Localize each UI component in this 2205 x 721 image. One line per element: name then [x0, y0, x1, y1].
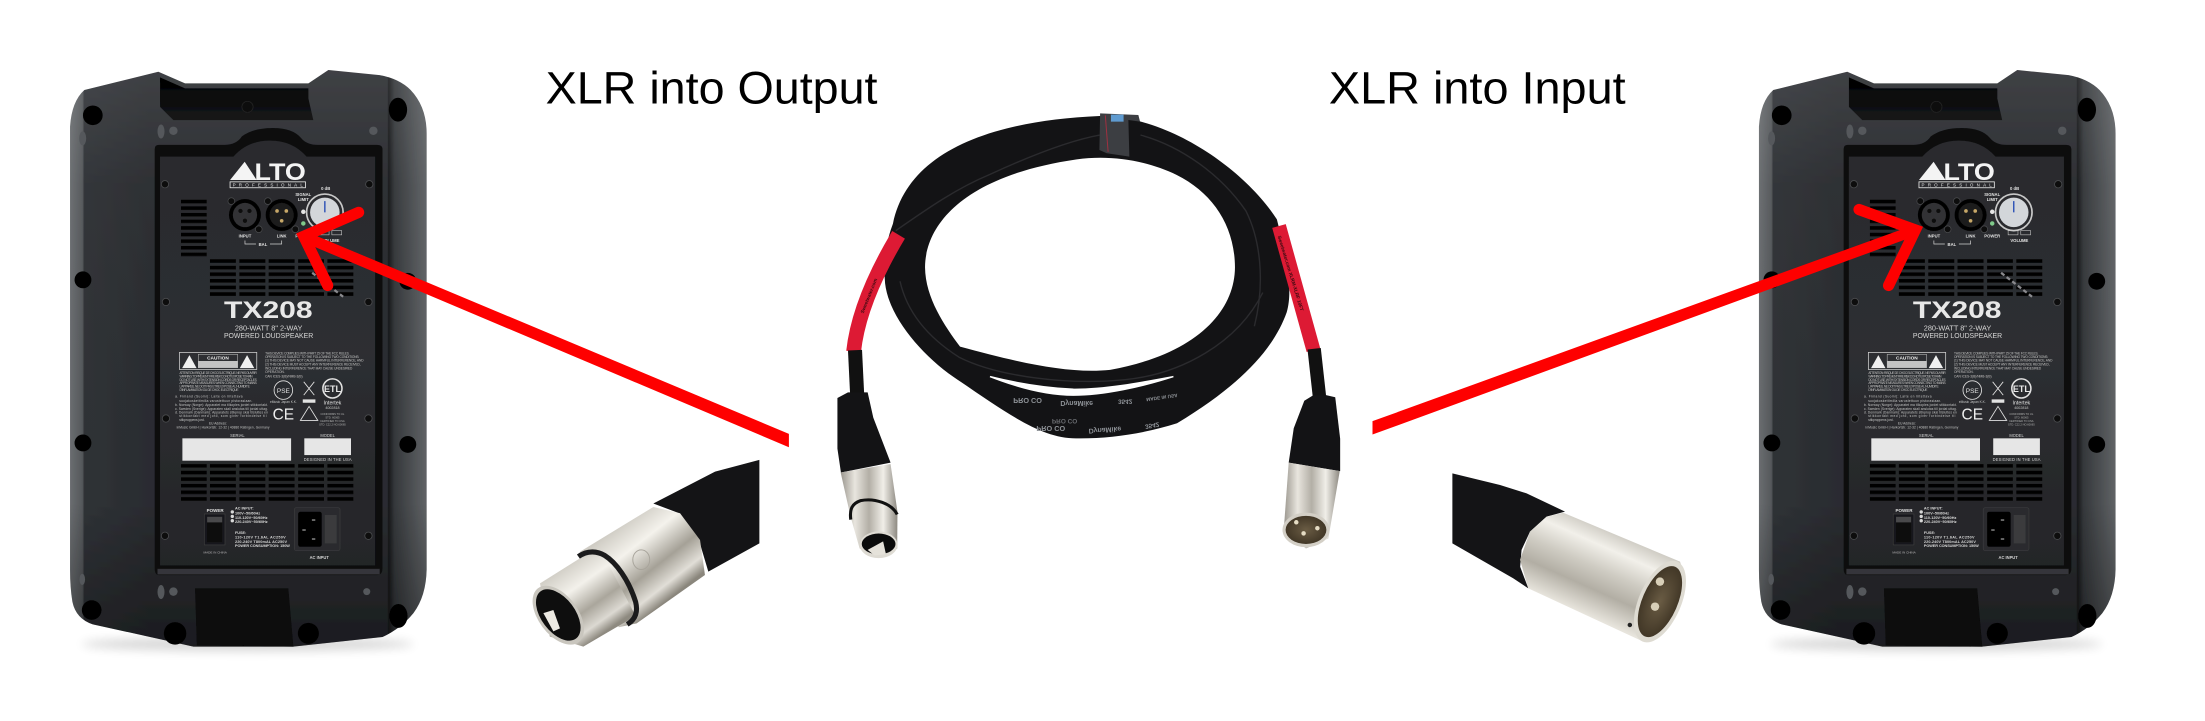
- compliance text: OPERATION IS SUBJECT TO THE FOLLOWING TWO CONDITIONS:: [1954, 355, 2048, 359]
- cable printing: 3542: [1118, 397, 1133, 404]
- AC ratings text: 110-120V T1.6AL AC250V: [235, 535, 286, 539]
- connector labels: POWER: [1984, 234, 2000, 239]
- cable printing: PRO CO: [1013, 396, 1042, 405]
- compliance text: D'INFLAMMATION OU DE CHOC ELECTRIQUE: [1868, 388, 1928, 392]
- heading: XLR into Input: XLR into Input: [1329, 62, 1626, 113]
- serial and model labels: DESIGNED IN THE USA: [1993, 457, 2041, 462]
- connector labels: LIMIT: [298, 197, 309, 202]
- sleeve printing: left: Sweetwater.com: [860, 278, 879, 314]
- serial and model labels: [1871, 433, 2041, 462]
- compliance text: (2) THIS DEVICE MUST ACCEPT ANY INTERFERENCE RECEIVED,: [1954, 362, 2050, 366]
- strand highlights: [896, 135, 1263, 381]
- compliance text: CAN ICES-3(B)/NMB-3(B): [1954, 375, 1992, 379]
- power switch: POWER: [1896, 508, 1913, 513]
- compliance text: L'APPAREIL NE DOIT PAS ETRE EXPOSE A L'HUMIDITE: [179, 385, 251, 389]
- control panel: [160, 141, 375, 565]
- connector labels: LIMIT: [1987, 197, 1998, 202]
- BAL bracket: [1934, 240, 1971, 244]
- sleeve printing: right: Sweetwater.com XLRM-XLRF 10FT: [1276, 235, 1304, 312]
- vents: [1870, 198, 2042, 502]
- white gap between strands: [990, 377, 1173, 395]
- panel screws: [1850, 181, 2062, 539]
- compliance text: L'APPAREIL NE DOIT PAS ETRE EXPOSE A L'HUMIDITE: [1868, 385, 1939, 389]
- model description: [1913, 325, 2002, 340]
- compliance text: THIS DEVICE COMPLIES WITH PART 15 OF THE FCC RULES.: [265, 351, 350, 355]
- arrow: to right speaker input: [1372, 210, 1918, 435]
- compliance text: [175, 351, 364, 430]
- AC inlet: AC INPUT: [1999, 555, 2018, 560]
- mounting holes: [1763, 98, 2105, 645]
- certification marks: Intertek: [2012, 400, 2031, 406]
- AC ratings text: AC INPUT:: [235, 506, 254, 510]
- AC ratings text: 110-120V~50/60Hz: [1924, 516, 1956, 520]
- AC ratings text: 100V~50/60Hz: [235, 511, 260, 515]
- AC inlet: [1983, 508, 2029, 560]
- certification marks: STD. 60065: [2014, 415, 2029, 419]
- compliance text: APPROPRIATE MEASURES WHEN CONNECTING TO MAINS: [1868, 381, 1946, 385]
- bottom recess: [195, 588, 293, 647]
- bottom recess: [1884, 588, 1982, 647]
- certification marks: eMusic Japan K.K.: [1959, 400, 1986, 404]
- power switch: MADE IN CHINA: [1892, 551, 1917, 555]
- XLR input socket: [1917, 198, 1951, 233]
- compliance text: d. Denmark (Danmark): Apparatets stikprop skal tilsluttes en: [1864, 411, 1957, 415]
- power switch: [1892, 508, 1917, 555]
- compliance text: D'INFLAMMATION OU DE CHOC ELECTRIQUE: [179, 388, 239, 392]
- frame lower strip: [158, 569, 380, 574]
- compliance text: APPROPRIATE MEASURES WHEN CONNECTING TO MAINS: [179, 381, 257, 385]
- compliance text: WARNING: TO PREVENT FIRE RISK DO NOT EXPOSE TO RAIN: [179, 374, 253, 378]
- AC inlet: [294, 508, 340, 560]
- XLR link socket: [265, 198, 299, 233]
- caution box: [179, 352, 257, 369]
- AC ratings text: [231, 506, 290, 548]
- certification marks: ETL: [2013, 384, 2030, 394]
- handle screw: [1931, 101, 1942, 113]
- body screws: [1768, 124, 2066, 599]
- AC ratings text: 220-240V~50/60Hz: [1924, 520, 1957, 524]
- certification marks: STD. 60065: [325, 415, 340, 419]
- certification marks: Intertek: [324, 400, 342, 406]
- compliance text: suojakoskettimilla varustettuun pistorasiaan.: [1868, 399, 1941, 403]
- model name: TX208: [224, 297, 313, 324]
- power switch: POWER: [207, 508, 224, 513]
- XLR input socket: [228, 198, 262, 233]
- compliance text: WARNING: TO PREVENT FIRE RISK DO NOT EXPOSE TO RAIN: [1868, 374, 1942, 378]
- cable printing: 3542: [1144, 420, 1160, 430]
- body shading: [1759, 70, 2116, 647]
- certification marks: CERTIFIED TO CSA: [2009, 419, 2034, 423]
- compliance text: (2) THIS DEVICE MUST ACCEPT ANY INTERFERENCE RECEIVED,: [265, 362, 361, 366]
- body shading: [70, 70, 427, 647]
- compliance text: c. Sweden (Sverige): Apparaten skall anslutas till jordat uttag.: [1864, 407, 1957, 411]
- certification marks: CONFORMS TO UL: [2009, 412, 2034, 416]
- heading: XLR into Output: XLR into Output: [546, 62, 878, 113]
- certification marks: STD. C22.2 NO.60065: [319, 422, 346, 426]
- certification marks: CONFORMS TO UL: [320, 412, 345, 416]
- body screws: [79, 124, 378, 599]
- certification marks: [1959, 379, 2035, 426]
- certification marks: ETL: [324, 384, 341, 394]
- power switch: MADE IN CHINA: [204, 551, 228, 555]
- male XLR connector: [1282, 395, 1340, 548]
- cable printing: [1013, 392, 1178, 434]
- speaker: left: [70, 70, 427, 651]
- compliance text: INCLUDING INTERFERENCE THAT MAY CAUSE UNDESIRED: [265, 367, 353, 371]
- compliance text: a. Finland (Suomi): Laite on liitettava: [175, 395, 243, 399]
- AC ratings text: POWER CONSUMPTION: 150W: [235, 544, 290, 548]
- cable stub: right: [1314, 349, 1320, 399]
- certification marks: 4002818: [325, 406, 340, 410]
- compliance text: DO NOT USE WITH EXTENSION CORDS OR RECEPTACLES: [1868, 378, 1946, 382]
- AC ratings text: FUSE:: [1924, 531, 1935, 535]
- connector labels: [1928, 186, 2029, 247]
- model description: 280-WATT 8" 2-WAY: [235, 325, 303, 332]
- panel frame: [155, 128, 382, 575]
- compliance text: (1) THIS DEVICE MAY NOT CAUSE HARMFUL INTERFERENCE, AND: [1954, 358, 2053, 362]
- XLR link socket: [1953, 198, 1988, 233]
- compliance text: ATTENTION: RISQUE DE CHOC ELECTRIQUE. NE PAS OUVRIR: [1868, 371, 1946, 375]
- compliance text: OPERATION.: [265, 370, 285, 374]
- compliance text: INCLUDING INTERFERENCE THAT MAY CAUSE UNDESIRED: [1954, 367, 2042, 371]
- connector labels: INPUT: [1928, 234, 1941, 239]
- logo: ALTO: PROFESSIONAL: [1922, 183, 1992, 188]
- AC ratings text: 110-120V T1.6AL AC250V: [1924, 535, 1975, 539]
- certification marks: eMusic Japan K.K.: [270, 400, 297, 404]
- volume knob: [301, 194, 343, 235]
- speaker: right: [1759, 70, 2116, 651]
- AC ratings text: 220-240V T800mAL AC250V: [1924, 540, 1976, 544]
- AC ratings text: POWER CONSUMPTION: 150W: [1924, 544, 1979, 548]
- model description: 280-WATT 8" 2-WAY: [1924, 325, 1992, 332]
- ground shadow: [82, 637, 413, 651]
- AC inlet: AC INPUT: [310, 555, 329, 560]
- caution box: CAUTION: [1896, 356, 1918, 362]
- compliance text: THIS DEVICE COMPLIES WITH PART 15 OF THE FCC RULES.: [1954, 351, 2038, 355]
- handle screw: [242, 101, 253, 113]
- speaker body: [70, 70, 427, 647]
- compliance text: (1) THIS DEVICE MAY NOT CAUSE HARMFUL INTERFERENCE, AND: [265, 358, 364, 362]
- AC ratings text: 100V~50/60Hz: [1924, 511, 1949, 515]
- serial and model labels: SERIAL: [230, 433, 245, 438]
- connector labels: VOLUME: [2010, 238, 2029, 243]
- connector labels: LINK: [1966, 234, 1975, 239]
- AC ratings text: 110-120V~50/60Hz: [235, 516, 268, 520]
- compliance text: OPERATION.: [1954, 370, 1974, 374]
- compliance text: OPERATION IS SUBJECT TO THE FOLLOWING TWO CONDITIONS:: [265, 355, 359, 359]
- connector labels: VOLUME: [321, 238, 340, 243]
- compliance text: inMusic GmbH | Harkortstr. 12-32 | 40880 Ratingen, Germany: [177, 426, 270, 430]
- compliance text: ATTENTION: RISQUE DE CHOC ELECTRIQUE. NE PAS OUVRIR: [179, 371, 257, 375]
- logo: ALTO: [230, 159, 306, 188]
- model description: POWERED LOUDSPEAKER: [1913, 333, 2002, 340]
- model name: TX208: [1913, 297, 2002, 324]
- ground shadow: [1770, 637, 2102, 651]
- cable coil: [884, 116, 1289, 438]
- red sleeve: right: [1279, 226, 1313, 350]
- XLR cable: [837, 113, 1340, 558]
- connector labels: 0 dB: [2010, 186, 2019, 191]
- panel screws: [161, 181, 373, 539]
- serial and model labels: DESIGNED IN THE USA: [304, 457, 352, 462]
- serial and model labels: MODEL: [2009, 433, 2025, 438]
- model description: [224, 325, 313, 340]
- connector labels: BAL: [1948, 242, 1957, 247]
- compliance text: stikkontakt med jord, som giver forbindelse til: [1868, 414, 1956, 418]
- cable printing: PRO CO: [1052, 417, 1077, 424]
- compliance text: stikkontakt med jord, som giver forbindelse til: [179, 414, 267, 418]
- compliance text: stikproppens jord.: [1868, 418, 1894, 422]
- compliance text: d. Denmark (Danmark): Apparatets stikprop skal tilsluttes en: [175, 411, 268, 415]
- AC ratings text: AC INPUT:: [1924, 506, 1943, 510]
- compliance text: b. Norway (Norge): Apparatet ma tilkoples jordet stikkontakt.: [175, 403, 268, 407]
- power switch: [204, 508, 228, 555]
- certification marks: CE: [273, 406, 294, 423]
- logo: ALTO: PROFESSIONAL: [233, 183, 303, 188]
- compliance text: inMusic GmbH | Harkortstr. 12-32 | 40880 Ratingen, Germany: [1866, 426, 1959, 430]
- wire seen through vent: [2001, 273, 2032, 297]
- cable printing: DynaMike: [1088, 425, 1122, 434]
- caution box: CAUTION: [207, 356, 229, 362]
- logo: ALTO: LTO: [1943, 159, 1995, 186]
- model description: POWERED LOUDSPEAKER: [224, 333, 313, 340]
- compliance text: CAN ICES-3(B)/NMB-3(B): [265, 375, 303, 379]
- frame lower strip: [1846, 569, 2069, 574]
- handle recess: [160, 77, 313, 120]
- vents: [181, 198, 353, 502]
- AC ratings text: FUSE:: [235, 531, 246, 535]
- certification marks: 4002818: [2014, 406, 2028, 410]
- close-up: female XLR: [522, 460, 759, 654]
- red sleeve: left: [854, 235, 899, 352]
- certification marks: CERTIFIED TO CSA: [320, 419, 345, 423]
- certification marks: PSE: [1966, 388, 1979, 395]
- serial and model labels: [182, 433, 352, 462]
- certification marks: PSE: [277, 388, 291, 395]
- close-up: male XLR: [1452, 473, 1697, 650]
- volume knob: [1990, 194, 2032, 235]
- connector labels: LINK: [277, 234, 287, 239]
- certification marks: STD. C22.2 NO.60065: [2008, 422, 2035, 426]
- arrow: to left speaker output: [300, 212, 789, 447]
- connector labels: SIGNAL: [1984, 192, 2001, 197]
- wire seen through vent: [312, 273, 343, 297]
- logo: ALTO: [1919, 159, 1995, 188]
- compliance text: suojakoskettimilla varustettuun pistorasiaan.: [179, 399, 253, 403]
- certification marks: CE: [1962, 406, 1983, 423]
- compliance text: b. Norway (Norge): Apparatet ma tilkoples jordet stikkontakt.: [1864, 403, 1957, 407]
- connector labels: 0 dB: [321, 186, 330, 191]
- compliance text: [1864, 351, 2053, 430]
- AC ratings text: 220-240V T800mAL AC250V: [235, 540, 287, 544]
- connector labels: [239, 186, 340, 247]
- caution box: [1868, 352, 1946, 369]
- serial and model labels: MODEL: [320, 433, 336, 438]
- BAL bracket: [245, 240, 282, 244]
- cable stub: left: [855, 350, 857, 394]
- cable printing: PRO CO: [1036, 424, 1066, 433]
- certification marks: [270, 379, 346, 426]
- cable printing: MADE IN USA: [1146, 392, 1178, 402]
- AC ratings text: [1920, 506, 1979, 548]
- female XLR connector: [837, 392, 898, 558]
- connector labels: BAL: [259, 242, 268, 247]
- compliance text: c. Sweden (Sverige): Apparaten skall anslutas till jordat uttag.: [175, 407, 268, 411]
- serial and model labels: SERIAL: [1919, 433, 1934, 438]
- compliance text: a. Finland (Suomi): Laite on liitettava: [1864, 395, 1932, 399]
- compliance text: stikproppens jord.: [179, 418, 205, 422]
- connector labels: SIGNAL: [295, 192, 312, 197]
- AC ratings text: 220-240V~50/60Hz: [235, 520, 268, 524]
- compliance text: DO NOT USE WITH EXTENSION CORDS OR RECEPTACLES: [179, 378, 257, 382]
- handle recess: [1849, 77, 2002, 120]
- cable strap: [1099, 113, 1140, 157]
- compliance text: EU Address:: [1898, 421, 1916, 425]
- compliance text: EU Address:: [209, 421, 227, 425]
- control panel: [1849, 141, 2064, 565]
- connector labels: POWER: [295, 234, 311, 239]
- panel frame: [1844, 128, 2071, 575]
- connector labels: INPUT: [239, 234, 252, 239]
- logo: ALTO: LTO: [255, 159, 306, 186]
- speaker body: [1759, 70, 2116, 647]
- mounting holes: [75, 98, 416, 645]
- cable printing: DynaMike: [1060, 399, 1093, 406]
